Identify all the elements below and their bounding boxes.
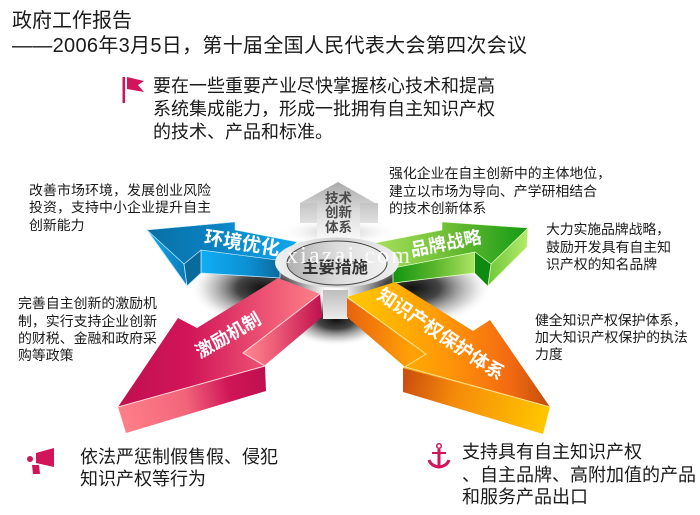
text: incentives: 的财税、金融和政府采 — [18, 330, 157, 346]
text: incentives: 完善自主创新的激励机 — [18, 295, 157, 311]
arrow: brand strategy (green): 品牌战略 — [409, 227, 483, 260]
arrow: incentive mechanism (red): 激励机制 — [192, 309, 264, 362]
text: IP protection: 力度 — [535, 346, 563, 362]
bottom left text — [80, 447, 278, 489]
icon: anchor — [429, 444, 449, 467]
arrow: brand strategy (green) — [375, 222, 528, 286]
arrow: environment optimisation (blue) — [147, 222, 297, 286]
text: enterprise innovation: 建立以市场为导向、产学研相结合 — [389, 183, 597, 199]
top text block: 系统集成能力，形成一批拥有自主知识产权 — [153, 99, 495, 119]
top text block: 要在一些重要产业尽快掌握核心技术和提高 — [153, 76, 495, 96]
title: ——2006年3月5日，第十届全国人民代表大会第四次会议 — [12, 34, 527, 57]
text: brand: 大力实施品牌战略， — [546, 221, 670, 237]
text: incentives: 制，实行支持企业创新 — [18, 313, 157, 329]
text: enterprise innovation: 强化企业在自主创新中的主体地位， — [389, 165, 611, 181]
text: IP protection — [535, 312, 688, 362]
bottom left text: 知识产权等行为 — [80, 469, 206, 489]
bottom right text — [462, 442, 696, 507]
centre ellipse: main measures — [275, 238, 410, 288]
title: 政府工作报告 — [12, 9, 132, 32]
bottom right text: 、自主品牌、高附加值的产品 — [462, 465, 696, 485]
arrow: technology innovation (grey): 创新 — [325, 204, 352, 220]
icon: flag — [122, 77, 144, 103]
central stem — [323, 290, 348, 319]
arrow: technology innovation (grey) — [300, 182, 378, 245]
shadows under the arrows — [190, 218, 492, 346]
text: brand: 鼓励开发具有自主知 — [546, 239, 671, 255]
top text block: 的技术、产品和标准。 — [153, 122, 333, 142]
icon: megaphone — [27, 448, 54, 474]
text: enterprise innovation — [389, 165, 611, 216]
centre ellipse: main measures: 主要措施 — [302, 258, 368, 277]
text: environment: 改善市场环境，发展创业风险 — [29, 182, 211, 198]
arrow: environment optimisation (blue): 环境优化 — [203, 226, 281, 260]
centre ellipse: main measures: xiazai.com — [286, 243, 410, 269]
arrow: technology innovation (grey): 体系 — [325, 219, 352, 235]
arrow: technology innovation (grey): 技术 — [325, 190, 352, 206]
text: environment — [29, 182, 211, 233]
arrow: incentive mechanism (red) — [118, 278, 322, 433]
text: IP protection: 加大知识产权保护的执法 — [535, 329, 688, 345]
bottom right text: 和服务产品出口 — [462, 487, 588, 507]
arrow: IP protection system (orange): 知识产权保护体系 — [374, 284, 508, 384]
text: IP protection: 健全知识产权保护体系， — [535, 312, 687, 328]
text: incentives: 购等政策 — [18, 347, 74, 363]
top text block — [153, 76, 495, 142]
text: enterprise innovation: 的技术创新体系 — [389, 200, 486, 216]
text: brand: 识产权的知名品牌 — [546, 256, 657, 272]
title — [12, 9, 527, 57]
text: environment: 创新能力 — [29, 217, 85, 233]
arrow: IP protection system (orange) — [347, 282, 550, 434]
bottom left text: 依法严惩制假售假、侵犯 — [80, 447, 278, 467]
text: brand — [546, 221, 671, 272]
bottom right text: 支持具有自主知识产权 — [462, 442, 642, 462]
text: environment: 投资，支持中小企业提升自主 — [29, 199, 211, 215]
text: incentives — [18, 295, 157, 363]
